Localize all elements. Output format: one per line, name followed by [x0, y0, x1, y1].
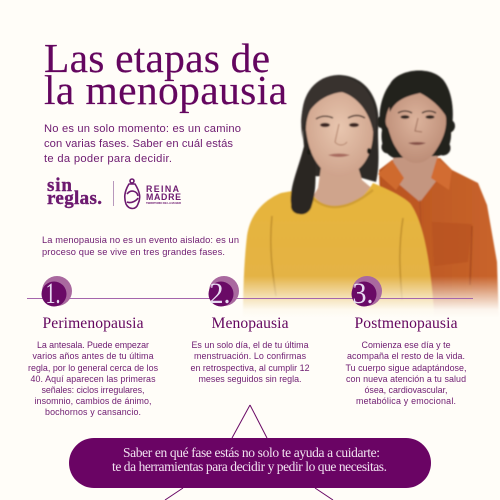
side curl [291, 142, 316, 214]
description: varios años antes de tu última [32, 351, 154, 361]
logo: Reina Madre [125, 179, 181, 208]
subtitle: te da poder para decidir. [44, 153, 172, 165]
face [386, 90, 446, 163]
wordmark: REINA [146, 184, 180, 194]
description: metabólica y emocional. [356, 396, 456, 406]
description: regla, por lo general cerca de los [28, 363, 159, 373]
description [346, 340, 466, 406]
woman in orange shirt [376, 70, 499, 325]
description [190, 340, 310, 384]
description: bochornos y cansancio. [45, 407, 141, 417]
step 3 badge: 3. [352, 277, 374, 310]
intro text [42, 235, 239, 257]
logo: sin reglas [47, 175, 102, 209]
description: menstruación. Lo confirmas [194, 351, 307, 361]
triangle outline behind callout [165, 405, 333, 500]
description: Comienza ese día y te [362, 340, 451, 350]
face [306, 92, 373, 177]
wordmark: TERRITORIO DE LA MUJER [146, 201, 181, 205]
sweater [243, 183, 435, 325]
title: Las etapas de [44, 35, 270, 81]
logo divider [112, 181, 115, 206]
heading: Menopausia [212, 315, 289, 332]
description: Es un solo día, el de tu última [192, 340, 309, 350]
photo: two women [230, 70, 500, 327]
heading: Postmenopausia [354, 315, 458, 332]
hair back [302, 75, 379, 182]
step 1 badge: 1. [46, 277, 60, 310]
intro text: La menopausia no es un evento aislado: es un [42, 235, 239, 245]
description: ósea, cardiovascular, [364, 385, 448, 395]
title: la menopausia [44, 67, 287, 113]
icon: reina madre figure [125, 179, 140, 208]
column: Postmenopausia [346, 315, 466, 406]
callout pill: te da herramientas para decidir y pedir lo que necesitas. [112, 459, 387, 474]
subtitle: No es un solo momento: es un camino [44, 123, 241, 135]
description: acompaña el resto de la vida. [347, 351, 465, 361]
wordmark [146, 184, 181, 205]
callout pill: Saber en qué fase estás no solo te ayuda a cuidarte: [123, 445, 380, 460]
subtitle [44, 123, 241, 165]
description: insomnio, cambios de ánimo, [34, 396, 152, 406]
logo: sin reglas: reglas. [47, 188, 102, 209]
description: señales: ciclos irregulares, [42, 385, 144, 395]
column: Perimenopausia [28, 315, 159, 417]
heading: Perimenopausia [42, 315, 144, 332]
description: meses seguidos sin regla. [198, 374, 302, 384]
description: 40. Aquí aparecen las primeras [30, 374, 156, 384]
description: con nueva atención a tu salud [346, 374, 466, 384]
wordmark: MADRE [146, 192, 181, 202]
subtitle: con varias fases. Saber en cuál estás [44, 138, 233, 150]
step 2 badge: 2. [210, 277, 230, 310]
logo: sin reglas: sin [47, 175, 72, 196]
description: La antesala. Puede empezar [37, 340, 149, 350]
description: en retrospectiva, al cumplir 12 [190, 363, 310, 373]
timeline line [27, 298, 473, 300]
title [44, 35, 287, 113]
description: Tu cuerpo sigue adaptándose, [346, 363, 466, 373]
description [28, 340, 159, 417]
hair back [380, 70, 453, 158]
neck [312, 160, 374, 214]
woman in yellow sweater [243, 75, 435, 325]
column: Menopausia [190, 315, 310, 384]
callout pill [69, 438, 431, 488]
intro text: proceso que se vive en tres grandes fases. [42, 247, 225, 257]
